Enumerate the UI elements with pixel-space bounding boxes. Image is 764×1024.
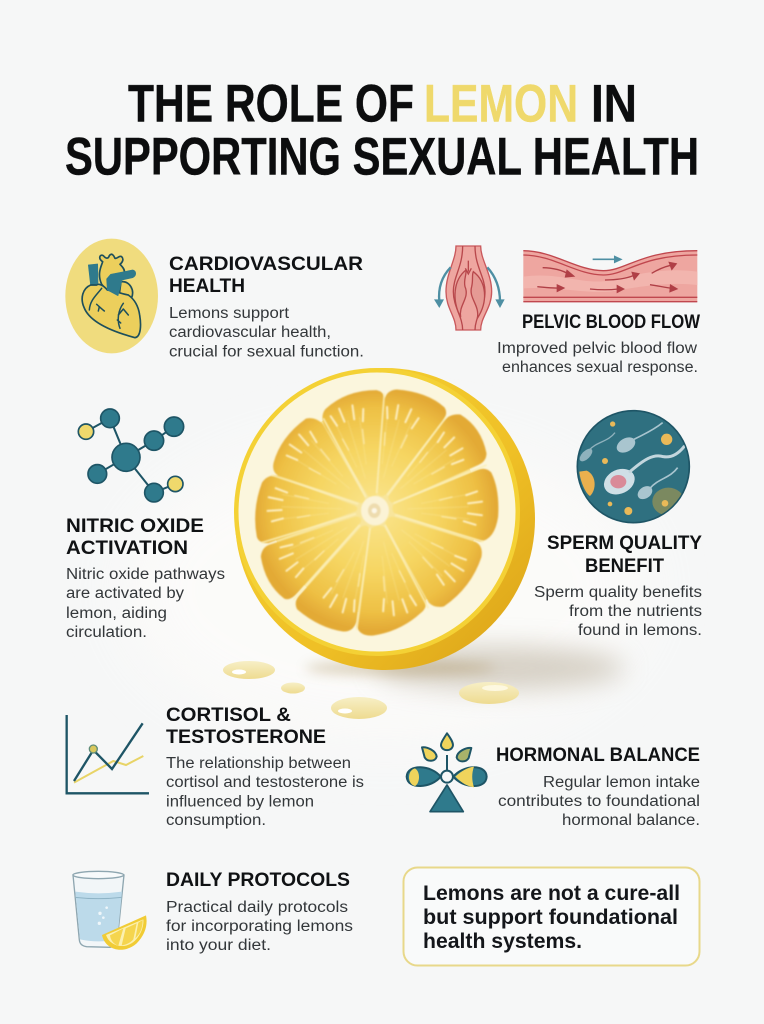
panel: hormonal balance: [407, 733, 700, 829]
text block: consumption.: [166, 812, 266, 829]
text block: [534, 584, 702, 639]
text block: Lemons support: [169, 305, 290, 322]
text block: lemon, aiding: [66, 605, 167, 622]
panel: pelvic blood flow: [434, 246, 700, 376]
heading: HEALTH: [169, 275, 245, 297]
text block: Sperm quality benefits: [534, 584, 702, 601]
callout: health systems.: [423, 930, 582, 953]
icon: molecule: [78, 409, 184, 502]
heading: DAILY PROTOCOLS: [166, 869, 350, 891]
heading: TESTOSTERONE: [166, 726, 326, 748]
text block: cardiovascular health,: [169, 324, 331, 341]
lemon body: [235, 368, 535, 670]
text block: enhances sexual response.: [502, 359, 698, 376]
icon: line chart: [67, 715, 149, 793]
heading: CORTISOL &: [166, 704, 291, 726]
text block: Regular lemon intake: [543, 774, 700, 791]
title: THE ROLE OF: [128, 74, 414, 134]
text block: crucial for sexual function.: [169, 344, 364, 360]
lemon segments: [257, 391, 497, 634]
text block: contributes to foundational: [498, 793, 700, 810]
heading: [66, 515, 204, 559]
icon: balance symbol: [407, 733, 487, 812]
icon: water glass with lemon: [73, 871, 147, 950]
panel: daily protocols: [73, 869, 353, 954]
lemon shadow: [305, 646, 625, 690]
title: IN: [591, 74, 637, 134]
text block: [166, 899, 353, 954]
heading: SPERM QUALITY: [547, 532, 702, 554]
heading: HORMONAL BALANCE: [496, 744, 700, 766]
text block: circulation.: [66, 624, 147, 641]
text block: hormonal balance.: [562, 812, 700, 829]
icon: heart: [65, 239, 158, 353]
heading: CARDIOVASCULAR: [169, 253, 363, 275]
callout: Lemons are not a cure-all: [423, 882, 680, 905]
heading: [547, 532, 702, 577]
title: [65, 74, 699, 186]
heading: ACTIVATION: [66, 537, 188, 559]
text block: [66, 566, 225, 641]
text block: influenced by lemon: [166, 794, 314, 810]
heading: [166, 704, 326, 748]
title: LEMON: [424, 74, 578, 134]
text block: [498, 774, 700, 829]
heading: PELVIC BLOOD FLOW: [522, 311, 700, 333]
lemon illustration: [223, 368, 625, 719]
panel: cardiovascular health: [65, 239, 364, 360]
text block: Nitric oxide pathways: [66, 566, 225, 583]
text block: [166, 755, 364, 829]
text block: Improved pelvic blood flow: [497, 340, 698, 357]
callout: but support foundational: [423, 906, 678, 929]
panel: nitric oxide activation: [66, 409, 225, 641]
text block: into your diet.: [166, 937, 271, 954]
text block: [497, 340, 698, 376]
callout: [404, 868, 700, 966]
text block: Practical daily protocols: [166, 899, 348, 916]
text block: The relationship between: [166, 755, 351, 772]
text block: cortisol and testosterone is: [166, 774, 364, 791]
lemon cut face: [234, 368, 520, 656]
icon: pelvic vessels: [434, 246, 697, 330]
juice droplets: [223, 661, 519, 719]
text block: [169, 305, 364, 360]
text block: from the nutrients: [569, 603, 702, 620]
heading: BENEFIT: [585, 555, 664, 577]
panel: sperm quality benefit: [534, 411, 702, 639]
panel: cortisol and testosterone: [67, 704, 364, 829]
heading: NITRIC OXIDE: [66, 515, 204, 537]
text block: found in lemons.: [578, 622, 702, 639]
heading: [169, 253, 363, 297]
text block: are activated by: [66, 585, 184, 602]
text block: for incorporating lemons: [166, 918, 353, 935]
icon: sperm circle: [577, 411, 689, 523]
